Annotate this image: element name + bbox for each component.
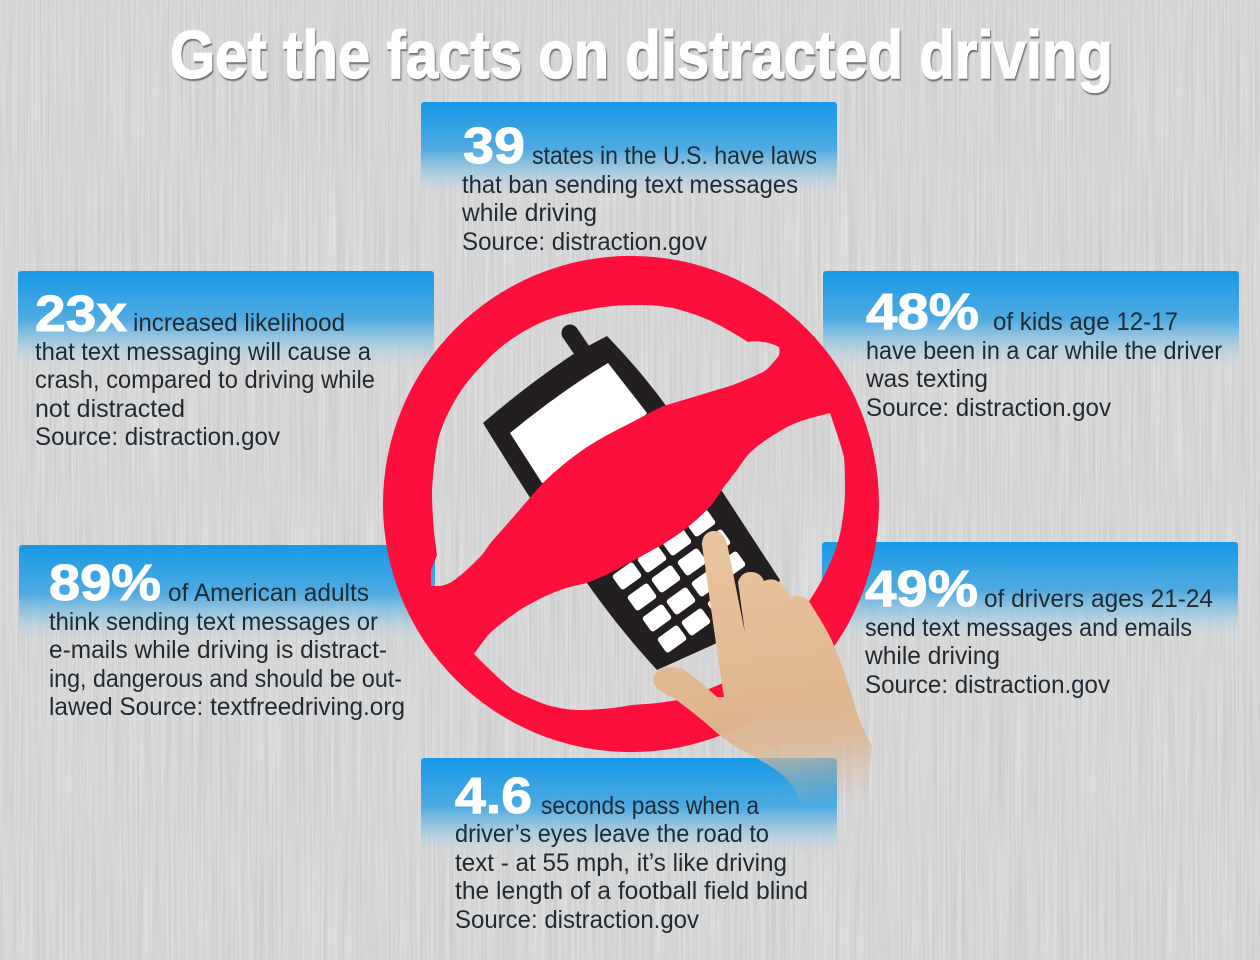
panel: 89%: 89% <box>49 554 161 611</box>
panel: 89%: e-mails while driving is distract- <box>49 636 387 664</box>
panel: 89%: lawed Source: textfreedriving.org <box>49 693 405 721</box>
panel: 49% <box>822 542 1238 699</box>
panel: 23x: crash, compared to driving while <box>35 366 375 394</box>
panel: 23x: 23x <box>35 285 127 342</box>
panel: 4.6 seconds <box>421 758 837 934</box>
panel: 48%: of kids age 12-17 <box>993 308 1178 336</box>
panel: 89% <box>19 545 435 721</box>
panel: 4.6 seconds: text - at 55 mph, it’s like driving <box>455 849 787 877</box>
panel: 49%: Source: distraction.gov <box>865 671 1110 699</box>
panel: 4.6 seconds: driver’s eyes leave the road to <box>455 820 769 848</box>
icon: hand pressing keypad <box>653 531 872 803</box>
panel: 4.6 seconds: seconds pass when a <box>541 792 759 820</box>
panel: 4.6 seconds: Source: distraction.gov <box>455 906 699 934</box>
icon: prohibition sign <box>383 256 879 752</box>
panel: 49%: while driving <box>864 642 1000 670</box>
panel: 48%: 48% <box>866 283 979 340</box>
panel: 23x: increased likelihood <box>133 309 345 337</box>
phone screen <box>510 363 647 483</box>
panel: 48% <box>823 271 1239 422</box>
panel: 39 states: while driving <box>461 199 597 227</box>
panel: 48%: was texting <box>865 365 988 393</box>
panel: 48%: Source: distraction.gov <box>866 394 1111 422</box>
panel: 23x <box>18 271 434 451</box>
panel: 89%: ing, dangerous and should be out- <box>49 665 402 693</box>
panel: 48%: have been in a car while the driver <box>866 337 1222 365</box>
phone body <box>483 336 780 670</box>
panel: 39 states: Source: distraction.gov <box>462 228 707 256</box>
panel: 23x: not distracted <box>35 395 185 423</box>
panel: 89%: think sending text messages or <box>49 608 378 636</box>
panel: 23x: Source: distraction.gov <box>35 423 280 451</box>
panel: 39 states: that ban sending text messages <box>462 171 798 199</box>
panel: 39 states <box>421 102 837 256</box>
panel: 23x: that text messaging will cause a <box>35 338 371 366</box>
panel: 49%: send text messages and emails <box>865 614 1192 642</box>
panel: 49%: 49% <box>865 560 978 617</box>
icon: mobile phone <box>483 333 780 670</box>
panel: 4.6 seconds: the length of a football field blind <box>455 877 808 905</box>
panel: 49%: of drivers ages 21-24 <box>984 585 1213 613</box>
panel: 39 states: 39 <box>463 117 525 174</box>
phone antenna <box>570 333 587 358</box>
panel: 4.6 seconds: 4.6 <box>455 767 532 824</box>
panel: 89%: of American adults <box>168 579 369 607</box>
phone keypad <box>612 508 746 654</box>
title: Get the facts on distracted driving <box>170 17 1113 93</box>
panel: 39 states: states in the U.S. have laws <box>532 142 817 170</box>
